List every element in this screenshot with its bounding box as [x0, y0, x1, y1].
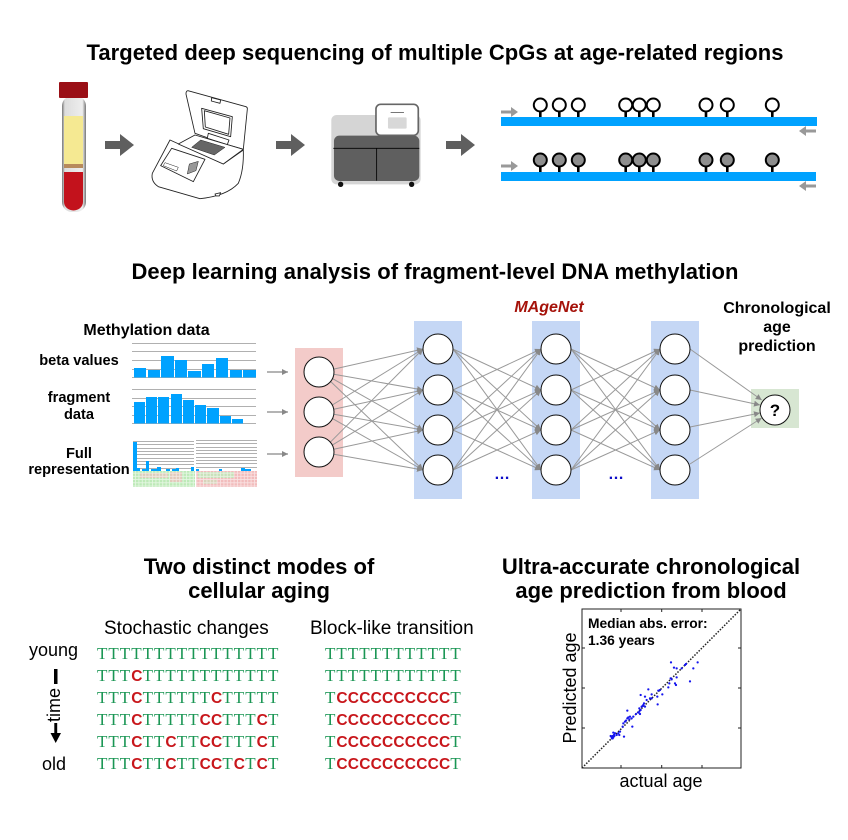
label: fragment data: fragment	[48, 390, 110, 406]
sequences: stochastic changes: TTTCTTTTTTTTTTTT	[97, 666, 279, 685]
connections: neural network	[330, 349, 762, 470]
label: chronological age prediction: prediction	[738, 338, 816, 355]
axis label: predicted age: Predicted age	[560, 632, 580, 744]
arrow: sequencer to reads	[446, 134, 475, 156]
label: stochastic changes: Stochastic changes	[104, 618, 269, 639]
heading: ultra-accurate prediction: age prediction from blood	[515, 578, 787, 603]
nodes: neural network	[304, 334, 790, 485]
heading: deep learning: Deep learning analysis of fragment-level DNA methylation	[132, 259, 738, 284]
heading: two modes: Two distinct modes of	[144, 554, 374, 579]
panel: hidden layer 2	[532, 321, 580, 499]
label: block-like transition: Block-like transition	[310, 618, 474, 639]
label: full representation: representation	[28, 462, 130, 478]
panel: input layer	[295, 348, 343, 477]
output question mark: ?	[770, 401, 780, 420]
ellipsis between layers 2 and 3: …	[608, 466, 624, 483]
callout: median absolute error: 1.36 years	[588, 633, 655, 648]
sequences: block-like transition	[325, 644, 461, 773]
sequences: stochastic changes: TTTCTTTTTTCTTTTT	[97, 688, 279, 707]
icon: sequencer	[331, 104, 421, 187]
panel: hidden layer 1	[414, 321, 462, 499]
label: time arrow	[44, 669, 64, 743]
label: full representation: Full	[66, 446, 92, 462]
sequences: block-like transition: TCCCCCCCCCCT	[325, 754, 461, 773]
panel: methylated amplicon	[501, 154, 816, 191]
arrow: tube to cycler	[105, 134, 134, 156]
sequences: stochastic changes: TTTCTTCTTCCTCTCT	[97, 754, 279, 773]
sequences: block-like transition: TCCCCCCCCCCT	[325, 688, 461, 707]
heading: ultra-accurate prediction: Ultra-accurate chronological	[502, 554, 800, 579]
sequences: block-like transition: TCCCCCCCCCCT	[325, 732, 461, 751]
axis label: actual age: actual age	[619, 771, 703, 791]
sequences: block-like transition: TCCCCCCCCCCT	[325, 710, 461, 729]
label: chronological age prediction: Chronological	[723, 300, 831, 317]
heading: two modes: cellular aging	[188, 578, 330, 603]
title: targeted sequencing: Targeted deep sequencing of multiple CpGs at age-related regions	[86, 40, 784, 65]
label: chronological age prediction: age	[763, 319, 791, 336]
chart: beta values	[132, 344, 256, 378]
sequences: block-like transition: TTTTTTTTTTTT	[325, 644, 461, 663]
label: fragment data: data	[64, 407, 95, 423]
label: methylation data: Methylation data	[83, 322, 210, 339]
ellipsis between layers 1 and 2: …	[494, 466, 510, 483]
chart: fragment data	[132, 390, 256, 424]
sequences: stochastic changes: TTTTTTTTTTTTTTTT	[97, 644, 279, 663]
panel: output layer	[751, 389, 799, 428]
label: young: young	[29, 640, 78, 660]
sequences: stochastic changes: TTTCTTCTTCCTTTCT	[97, 732, 279, 751]
callout: median absolute error: Median abs. error:	[588, 616, 708, 631]
label: old: old	[42, 754, 66, 774]
sequences: stochastic changes	[97, 644, 279, 773]
sequences: block-like transition: TTTTTTTTTTTT	[325, 666, 461, 685]
label: MAgeNet: MAgeNet	[514, 299, 584, 316]
arrow: cycler to sequencer	[276, 134, 305, 156]
chart: full representation	[133, 440, 257, 487]
label: beta values: beta values	[39, 353, 119, 369]
chart: predicted vs actual age scatter	[582, 609, 741, 768]
label: time arrow: time	[44, 688, 64, 722]
arrows: inputs to network	[267, 372, 288, 454]
sequences: stochastic changes: TTTCTTTTTCCTTTCT	[97, 710, 279, 729]
panel: unmethylated amplicon	[501, 98, 817, 136]
icon: blood tube	[59, 82, 88, 212]
icon: thermocycler	[152, 91, 247, 199]
panel: hidden layer 3	[651, 321, 699, 499]
